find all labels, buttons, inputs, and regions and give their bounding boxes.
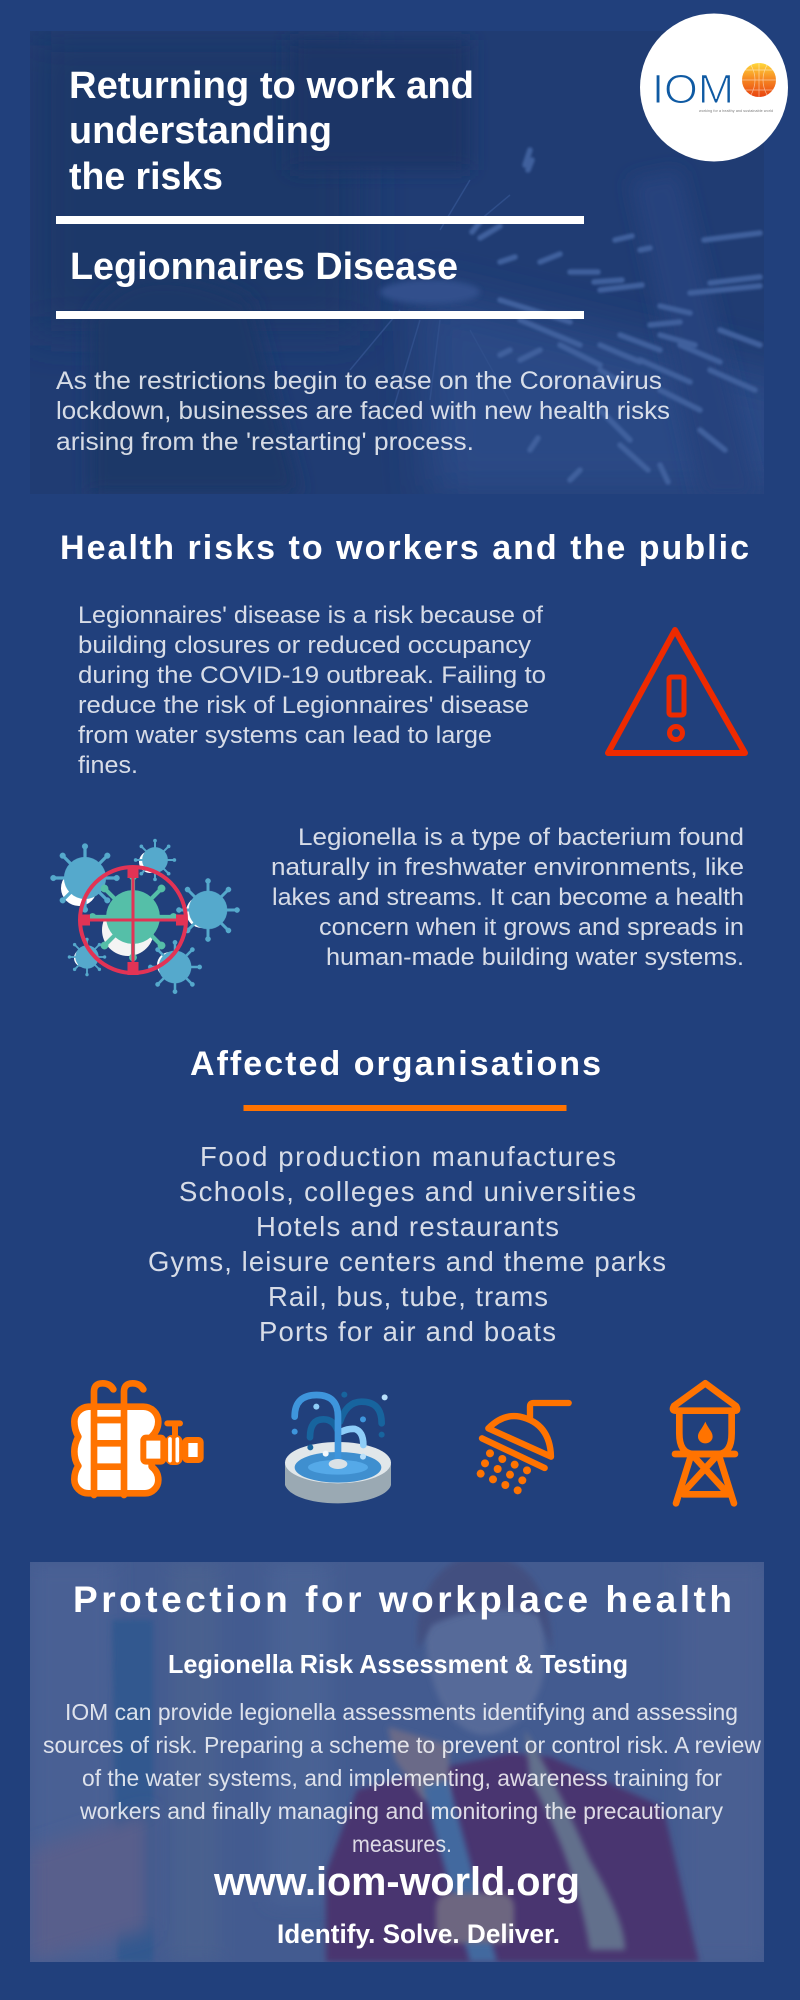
- logo: IOM: [640, 14, 788, 162]
- logo: IOM: IOM: [652, 66, 734, 112]
- list: affected organisations: Rail, bus, tube, trams: [268, 1281, 548, 1312]
- panel: header with welding photo: [30, 31, 800, 500]
- text block: Legionnaires' disease risk: building closures or reduced occupancy: [78, 632, 532, 659]
- text block: Legionnaires' disease risk: Legionnaires' disease is a risk because of: [78, 602, 543, 629]
- text block: IOM services: [43, 1699, 761, 1857]
- text block: Legionnaires' disease risk: reduce the risk of Legionnaires' disease: [78, 692, 529, 719]
- header photo background: [30, 31, 800, 500]
- intro text: As the restrictions begin to ease on the Coronavirus: [56, 367, 662, 395]
- intro text: arising from the 'restarting' process.: [56, 428, 474, 456]
- heading: protection: Protection for workplace health: [73, 1579, 732, 1620]
- icon: boiler: [74, 1383, 201, 1495]
- text block: Legionnaires' disease risk: [78, 602, 546, 779]
- orange rule: [244, 1105, 566, 1111]
- footer photo background: [30, 1555, 764, 1962]
- list: affected organisations: Hotels and restaurants: [256, 1211, 559, 1242]
- text block: Legionella bacterium: human-made building water systems.: [326, 944, 744, 971]
- list: affected organisations: [148, 1141, 666, 1347]
- list: affected organisations: Schools, colleges and universities: [179, 1176, 636, 1207]
- icon: water tower: [673, 1383, 737, 1503]
- tagline: Identify. Solve. Deliver.: [277, 1919, 560, 1949]
- text block: IOM services: sources of risk. Preparing a scheme to prevent or control risk. A review: [43, 1732, 761, 1758]
- text block: IOM services: measures.: [352, 1831, 452, 1857]
- title: returning to work: understanding: [69, 110, 332, 152]
- intro text: [56, 367, 670, 456]
- list: affected organisations: Gyms, leisure centers and theme parks: [148, 1246, 666, 1277]
- text block: IOM services: workers and finally managing and monitoring the precautionary: [79, 1798, 724, 1824]
- text block: Legionella bacterium: Legionella is a type of bacterium found: [298, 824, 744, 851]
- subtitle: Legionnaires Disease: Legionnaires Disease: [70, 246, 458, 288]
- intro text: lockdown, businesses are faced with new health risks: [56, 397, 670, 425]
- title: returning to work: the risks: [69, 156, 223, 198]
- text block: Legionella bacterium: [271, 824, 744, 971]
- text block: Legionella bacterium: concern when it grows and spreads in: [319, 914, 744, 941]
- text block: IOM services: of the water systems, and implementing, awareness training for: [82, 1765, 722, 1791]
- heading: affected organisations: Affected organisations: [190, 1045, 601, 1083]
- list: affected organisations: Food production manufactures: [200, 1141, 616, 1172]
- panel: protection for workplace health: [30, 1555, 764, 1962]
- title: returning to work: [69, 65, 474, 198]
- icon: fountain: [285, 1392, 391, 1503]
- text block: Legionnaires' disease risk: fines.: [78, 752, 138, 779]
- rule above subtitle: [56, 216, 584, 224]
- text block: IOM services: IOM can provide legionella assessments identifying and assessing: [65, 1699, 738, 1725]
- rule below subtitle: [56, 311, 584, 319]
- logo: IOM: working for a healthy and sustainable world: [699, 109, 773, 113]
- list: affected organisations: Ports for air and boats: [259, 1316, 556, 1347]
- icon: globe: [742, 63, 776, 97]
- title: returning to work: Returning to work and: [69, 65, 474, 107]
- heading: health risks: Health risks to workers and the public: [60, 529, 749, 567]
- text block: Legionnaires' disease risk: during the COVID-19 outbreak. Failing to: [78, 662, 546, 689]
- text block: Legionella bacterium: lakes and streams. It can become a health: [272, 884, 744, 911]
- viruses: [50, 839, 240, 994]
- subheading: risk assessment: Legionella Risk Assessment & Testing: [168, 1649, 628, 1679]
- website url: www.iom-world.org: [213, 1860, 580, 1904]
- crosshair: [79, 866, 187, 975]
- icon: virus target: [50, 839, 240, 994]
- text block: Legionella bacterium: naturally in freshwater environments, like: [271, 854, 744, 881]
- text block: Legionnaires' disease risk: from water systems can lead to large: [78, 722, 492, 749]
- icon: shower: [477, 1403, 569, 1494]
- icon: warning triangle: [608, 630, 745, 753]
